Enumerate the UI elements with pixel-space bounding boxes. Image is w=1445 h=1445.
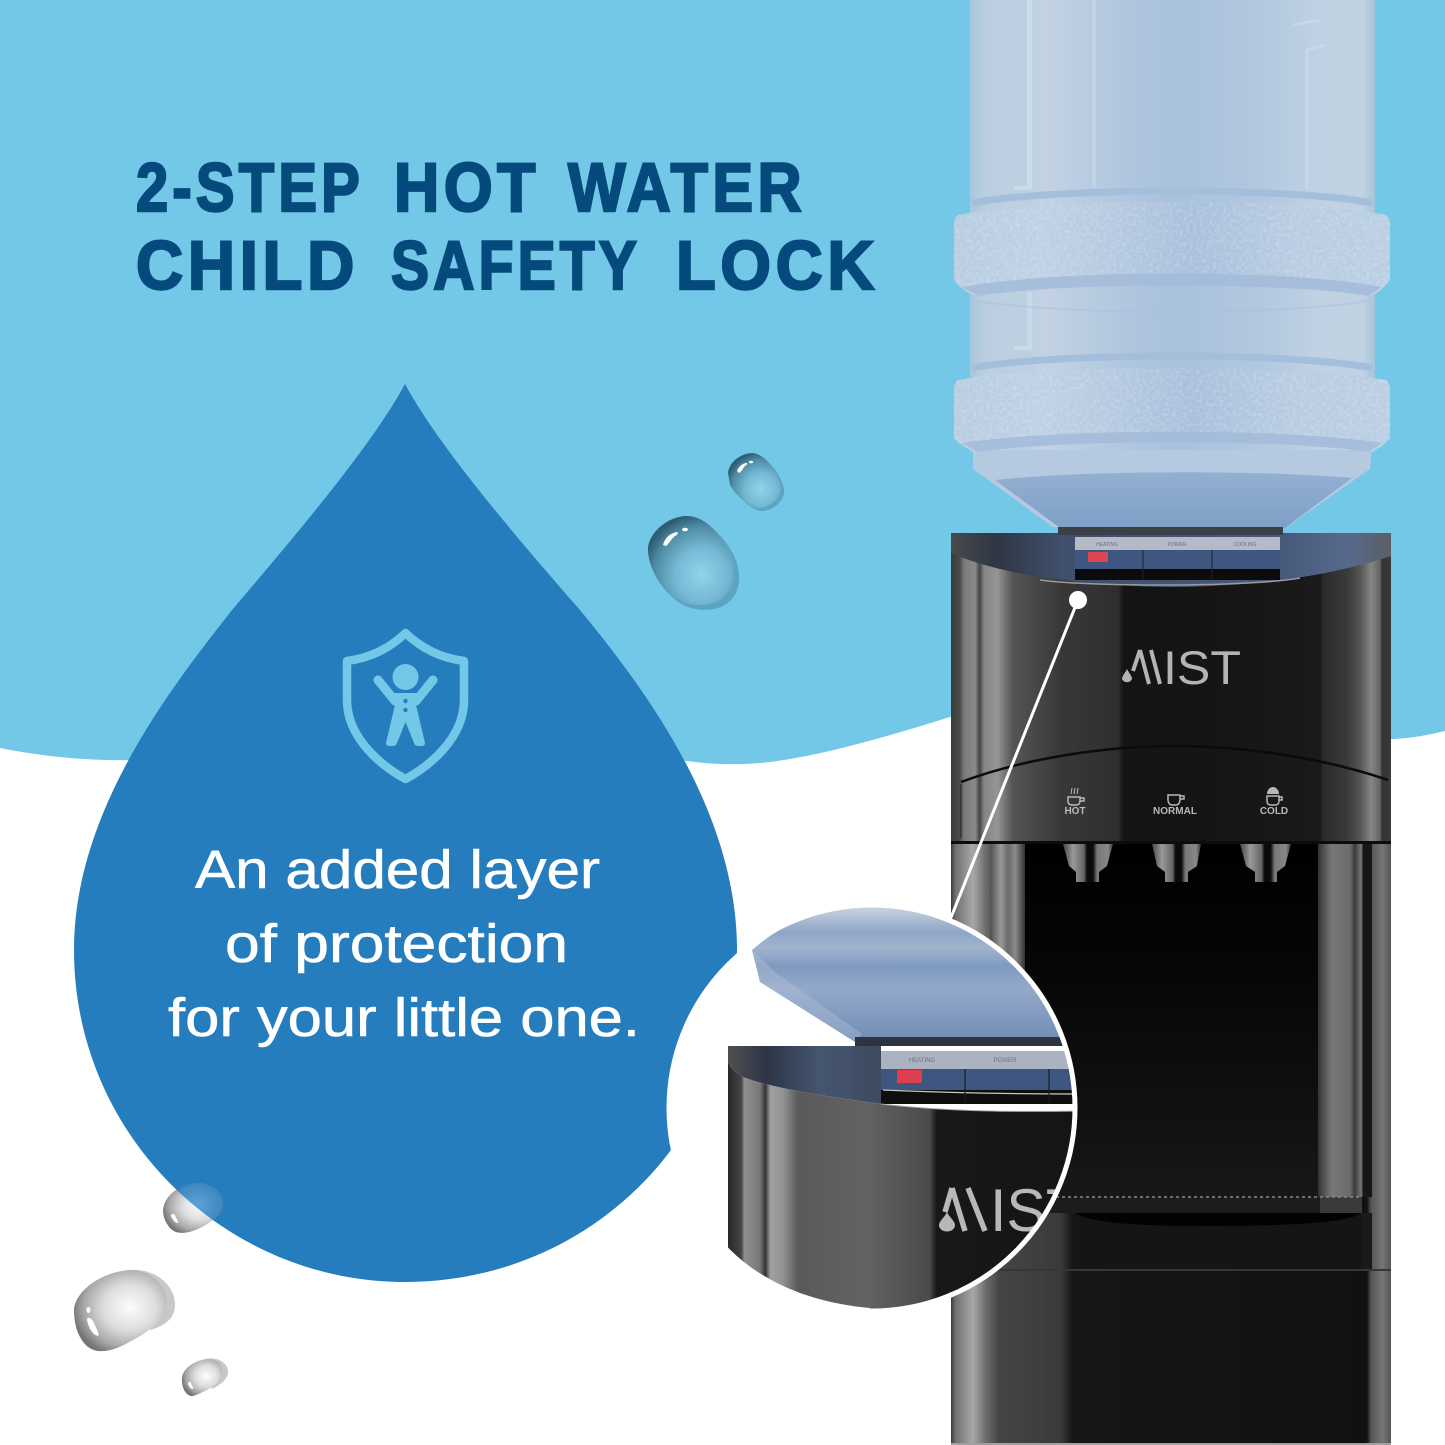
water droplet: small grey bbox=[182, 1358, 228, 1396]
large blue water drop bbox=[74, 384, 737, 1282]
faucet: hot bbox=[1063, 844, 1113, 882]
lens red button bbox=[897, 1070, 922, 1083]
white area below lens body bbox=[734, 1253, 870, 1308]
lens logo bbox=[939, 1187, 1056, 1232]
water droplet: large blue bbox=[648, 516, 739, 610]
neck shoulder bbox=[973, 450, 1372, 527]
cold label bbox=[1260, 787, 1288, 817]
upper textured rib bbox=[954, 202, 1390, 296]
brand logo: IST bbox=[1163, 641, 1241, 694]
title bbox=[136, 149, 879, 304]
cooler head bbox=[951, 527, 1391, 844]
normal label: NORMAL bbox=[1153, 806, 1197, 817]
title: CHILD bbox=[136, 227, 359, 304]
panel labels: HEATING bbox=[1096, 542, 1118, 548]
title: LOCK bbox=[676, 227, 879, 304]
lid hinge bbox=[1058, 527, 1283, 535]
water droplet: large grey bbox=[74, 1270, 175, 1351]
title: SAFETY bbox=[391, 227, 641, 304]
title: HOT bbox=[394, 149, 540, 226]
brand logo bbox=[1122, 641, 1241, 694]
cold label: COLD bbox=[1260, 806, 1288, 817]
body text: of protection bbox=[225, 914, 568, 974]
normal label bbox=[1153, 795, 1197, 817]
lower textured rib bbox=[954, 368, 1390, 452]
body text: for your little one. bbox=[168, 988, 640, 1048]
lens panel labels bbox=[909, 1058, 1016, 1062]
callout pointer bbox=[950, 591, 1087, 920]
right inner column bbox=[1318, 844, 1372, 1197]
bottle body bbox=[970, 0, 1375, 452]
faucet: cold bbox=[1240, 844, 1291, 882]
lower recess bbox=[1075, 1213, 1362, 1270]
panel labels: POWER bbox=[1168, 542, 1187, 548]
lens panel labels: POWER bbox=[994, 1058, 1017, 1064]
body text: An added layer bbox=[195, 840, 600, 900]
hot label bbox=[1064, 788, 1086, 817]
background: light blue wave bbox=[0, 0, 1445, 764]
cooler lower body bbox=[951, 844, 1391, 1445]
top surface bbox=[951, 533, 1391, 587]
drip tray bbox=[1026, 1197, 1362, 1213]
lens panel bbox=[881, 1051, 1081, 1104]
title: 2-STEP bbox=[136, 149, 364, 226]
lens logo: IST bbox=[990, 1177, 1082, 1244]
open lid bbox=[752, 905, 1080, 1042]
left inner column bbox=[990, 844, 1026, 1204]
water droplet: over drop edge bbox=[163, 1183, 223, 1233]
child figure bbox=[378, 664, 433, 746]
water cooler bbox=[951, 0, 1391, 1445]
panel labels bbox=[1096, 542, 1257, 548]
lens panel labels: HEATING bbox=[909, 1058, 935, 1064]
water droplet: small blue bbox=[728, 453, 784, 511]
magnifier callout: lid lock close-up bbox=[668, 904, 1085, 1330]
red lock button bbox=[1088, 552, 1108, 562]
panel labels: COOLING bbox=[1233, 542, 1257, 548]
dispensing recess bbox=[1025, 844, 1319, 1197]
lens ring bbox=[669, 905, 1075, 1311]
control panel bbox=[1075, 537, 1280, 580]
faucet: normal bbox=[1152, 844, 1201, 882]
water bottle bbox=[954, 0, 1390, 528]
bottle neck bbox=[995, 472, 1352, 528]
face band line bbox=[961, 746, 1388, 782]
icon: child safety shield bbox=[347, 633, 464, 779]
top surface close-up bbox=[728, 1046, 881, 1104]
body text bbox=[168, 840, 640, 1048]
lens body face bbox=[728, 1060, 1085, 1320]
hot label: HOT bbox=[1064, 806, 1086, 817]
title: WATER bbox=[568, 149, 806, 226]
